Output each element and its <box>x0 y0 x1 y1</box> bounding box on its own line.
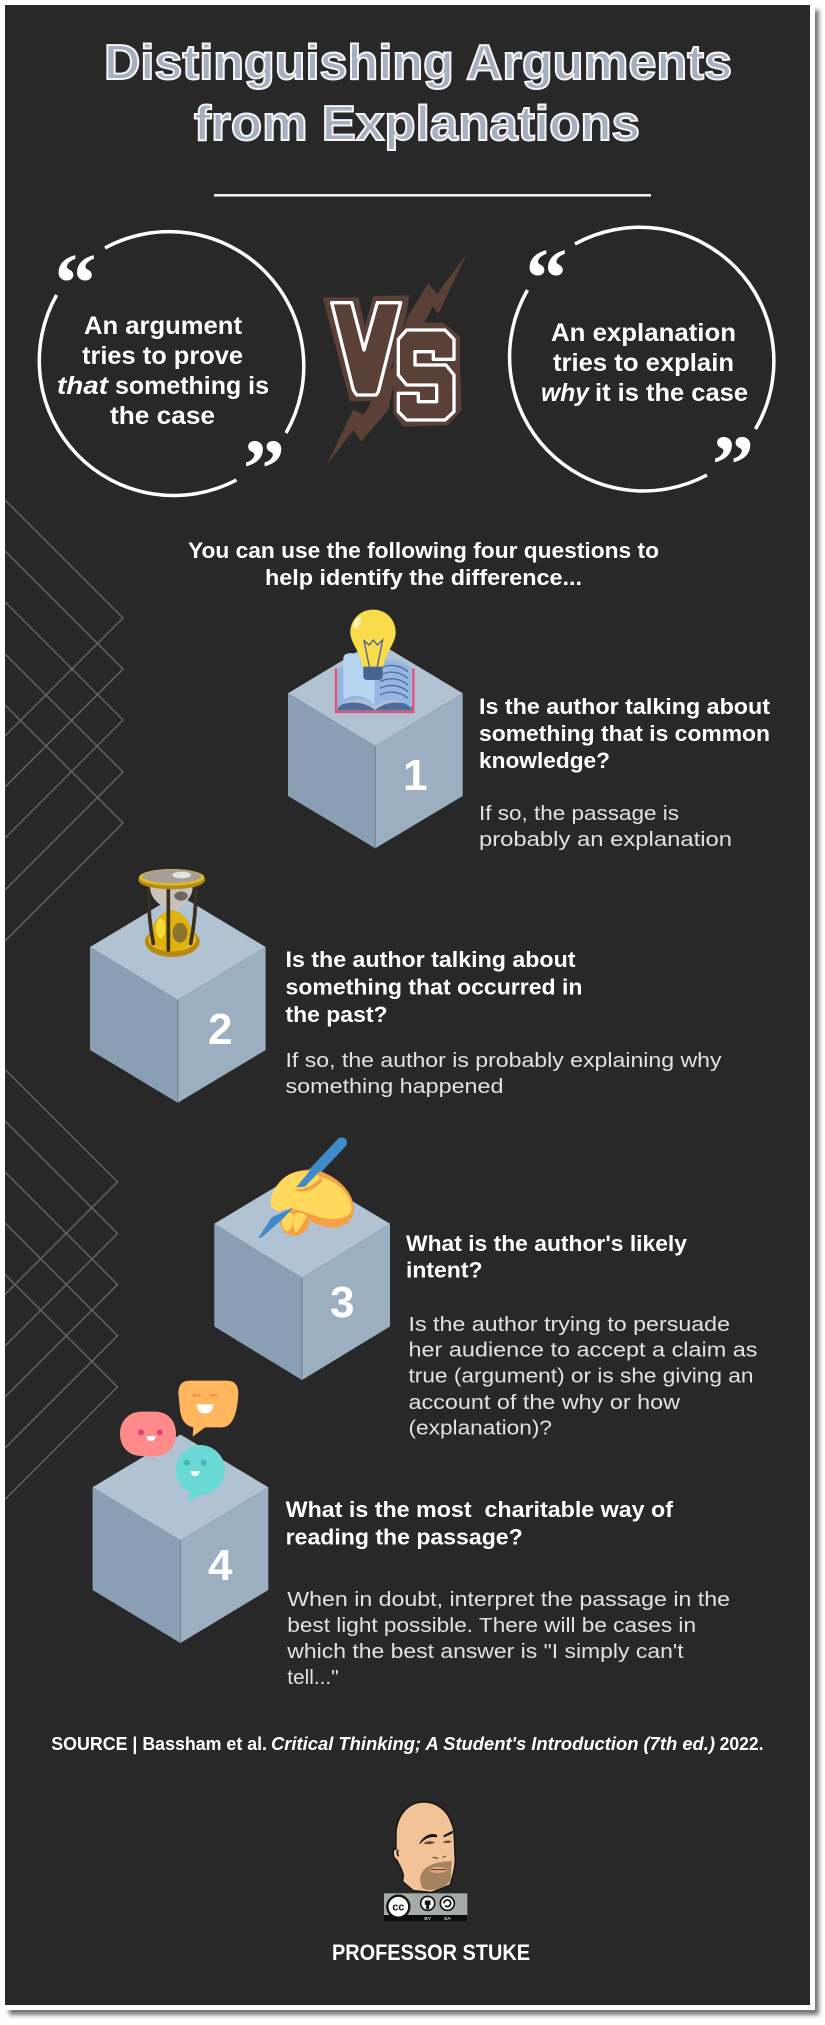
question 1 text: something that is common <box>479 721 770 746</box>
panel: argument quote: An argument <box>84 312 243 340</box>
author name: PROFESSOR STUKE <box>332 1940 530 1965</box>
question 1 text: probably an explanation <box>479 828 732 851</box>
cube 1: 1 <box>403 751 427 800</box>
source line: SOURCE | Bassham et al. <box>51 1734 267 1754</box>
panel: explanation quote: ” <box>712 419 754 512</box>
panel: argument quote <box>39 232 304 516</box>
panel: argument quote: something is <box>115 372 269 400</box>
question 2 text <box>286 947 722 1098</box>
cube 4 <box>93 1434 268 1643</box>
question 3 text: (explanation)? <box>408 1417 552 1440</box>
panel: argument quote: “ <box>54 237 96 330</box>
icon: book and light bulb <box>336 610 413 712</box>
question 3 text: her audience to accept a claim as <box>408 1338 758 1362</box>
license badge: SA <box>444 1916 451 1922</box>
source line <box>51 1734 764 1754</box>
question 4 text: When in doubt, interpret the passage in the <box>287 1588 730 1611</box>
icon: writing hand <box>258 1143 354 1238</box>
question 3 text: What is the author's likely <box>406 1231 688 1256</box>
cube 3 <box>214 1171 390 1380</box>
question 1 text: If so, the passage is <box>479 802 679 825</box>
cube 2 <box>90 894 266 1103</box>
panel: explanation quote: it is the case <box>595 379 748 407</box>
panel: argument quote: that <box>57 372 110 400</box>
background lattice upper <box>5 500 123 941</box>
panel: explanation quote: why <box>541 379 590 407</box>
question 4 text: What is the most charitable way of <box>286 1497 674 1522</box>
background lattice lower <box>5 1070 118 1500</box>
question 2 text: Is the author talking about <box>286 947 576 972</box>
source line: 2022. <box>720 1734 764 1754</box>
icon: chat bubbles <box>120 1381 238 1502</box>
panel: argument quote: ” <box>243 423 285 516</box>
cube 1 <box>288 641 463 848</box>
question 3 text <box>406 1231 758 1440</box>
panel: argument quote: the case <box>110 402 215 430</box>
portrait <box>393 1802 455 1892</box>
title: Distinguishing Arguments <box>104 36 732 90</box>
divider <box>214 194 651 197</box>
question 2 text: something happened <box>286 1075 504 1098</box>
question 4 text: tell..." <box>287 1666 339 1689</box>
question 3 text: true (argument) or is she giving an <box>408 1365 754 1388</box>
panel: explanation quote: An explanation <box>551 319 736 347</box>
license badge <box>384 1893 467 1922</box>
question 1 text: Is the author talking about <box>479 694 771 719</box>
question 2 text: something that occurred in <box>286 975 582 1000</box>
title <box>104 36 732 151</box>
question 4 text: reading the passage? <box>286 1525 523 1550</box>
panel: argument quote: tries to prove <box>82 342 243 370</box>
question 4 text <box>286 1497 730 1689</box>
question 2 text: the past? <box>286 1002 388 1027</box>
panel: explanation quote: “ <box>526 232 568 325</box>
icon: VS lightning <box>323 254 467 465</box>
title: from Explanations <box>194 97 640 151</box>
intro text: You can use the following four questions to <box>188 538 659 563</box>
question 4 text: best light possible. There will be cases in <box>287 1614 696 1637</box>
panel: explanation quote: tries to explain <box>553 349 734 377</box>
license badge: BY <box>424 1916 432 1922</box>
cube 3: 3 <box>330 1278 354 1327</box>
question 1 text <box>479 694 771 851</box>
question 3 text: intent? <box>406 1258 482 1283</box>
question 2 text: If so, the author is probably explaining why <box>286 1049 722 1072</box>
panel: explanation quote <box>510 227 774 512</box>
cube 4: 4 <box>208 1541 233 1590</box>
question 1 text: knowledge? <box>479 748 610 773</box>
question 3 text: account of the why or how <box>408 1391 680 1414</box>
question 3 text: Is the author trying to persuade <box>408 1313 730 1336</box>
source line: Critical Thinking; A Student's Introduction (7th ed.) <box>271 1734 715 1754</box>
intro text <box>188 538 659 590</box>
license badge: cc <box>392 1901 404 1913</box>
question 4 text: which the best answer is "I simply can't <box>286 1640 684 1663</box>
intro text: help identify the difference... <box>265 565 582 590</box>
icon: hourglass <box>138 869 205 957</box>
cube 2: 2 <box>208 1005 232 1054</box>
